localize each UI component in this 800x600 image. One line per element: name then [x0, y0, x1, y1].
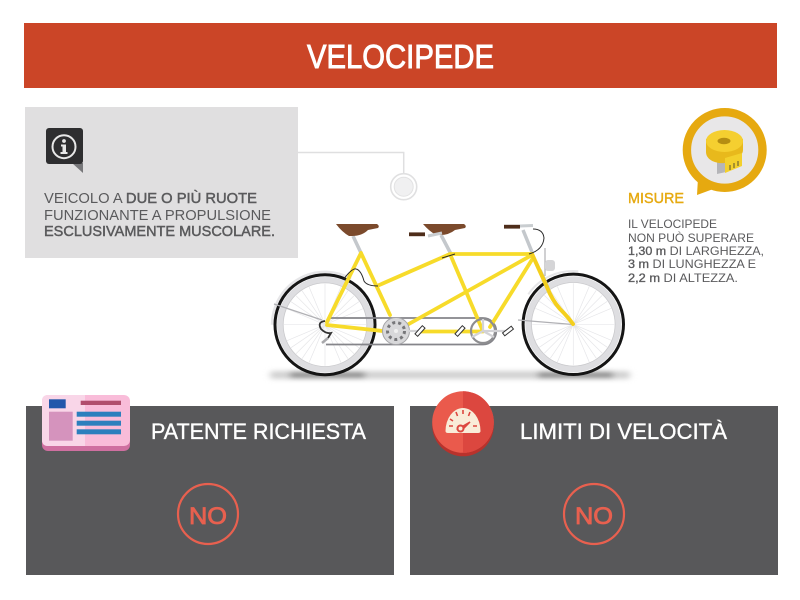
- title: VELOCIPEDE: [307, 38, 494, 75]
- answer: no: NO: [575, 503, 613, 530]
- measures text: NON PUÒ SUPERARE: [628, 230, 754, 245]
- definition text: VEICOLO A DUE O PIÙ RUOTE: [44, 190, 257, 207]
- bicycle illustration: [270, 224, 630, 379]
- saddle middle: [423, 224, 466, 235]
- ground shadow: [270, 371, 630, 379]
- front chainring: [382, 318, 410, 344]
- measures text: [628, 217, 764, 285]
- heading: misure: MISURE: [628, 191, 684, 207]
- pedals: [415, 326, 513, 336]
- panel: speed limits: [410, 391, 778, 575]
- heading: patente richiesta: PATENTE RICHIESTA: [151, 419, 366, 444]
- seat posts and stem: [353, 230, 548, 288]
- definition text: [44, 190, 275, 240]
- measures text: 3 m DI LUNGHEZZA E: [628, 257, 756, 271]
- frame: [327, 253, 573, 332]
- front wheel: [523, 271, 624, 374]
- icon: licence card: [42, 395, 130, 451]
- icon: measuring tape badge: [687, 112, 762, 195]
- header band: [24, 23, 777, 88]
- rear chainring: [408, 319, 505, 343]
- derailleur: [320, 321, 331, 343]
- measures text: 1,30 m DI LARGHEZZA,: [628, 244, 764, 258]
- connector line and marker: [298, 152, 417, 200]
- panel: licence required: [26, 395, 394, 575]
- answer: no: [564, 484, 624, 544]
- handlebars: [409, 226, 533, 236]
- brake lines: [274, 248, 573, 324]
- icon: speedometer: [432, 391, 494, 456]
- definition text: FUNZIONANTE A PROPULSIONE: [44, 208, 271, 224]
- answer: no: [178, 484, 238, 544]
- panel: definition: [25, 107, 298, 258]
- headlight: [545, 260, 555, 271]
- rear wheel: [272, 272, 375, 375]
- definition text: ESCLUSIVAMENTE MUSCOLARE.: [44, 224, 275, 240]
- answer: no: NO: [189, 503, 227, 530]
- heading: limiti di velocità: LIMITI DI VELOCITÀ: [520, 419, 727, 444]
- measures text: 2,2 m DI ALTEZZA.: [628, 271, 738, 285]
- panel: measures: [628, 112, 764, 285]
- measures text: IL VELOCIPEDE: [628, 217, 717, 231]
- saddle rear: [336, 224, 379, 236]
- brake cables: [343, 229, 544, 286]
- icon: info bubble: [46, 128, 83, 173]
- chain: [326, 318, 496, 344]
